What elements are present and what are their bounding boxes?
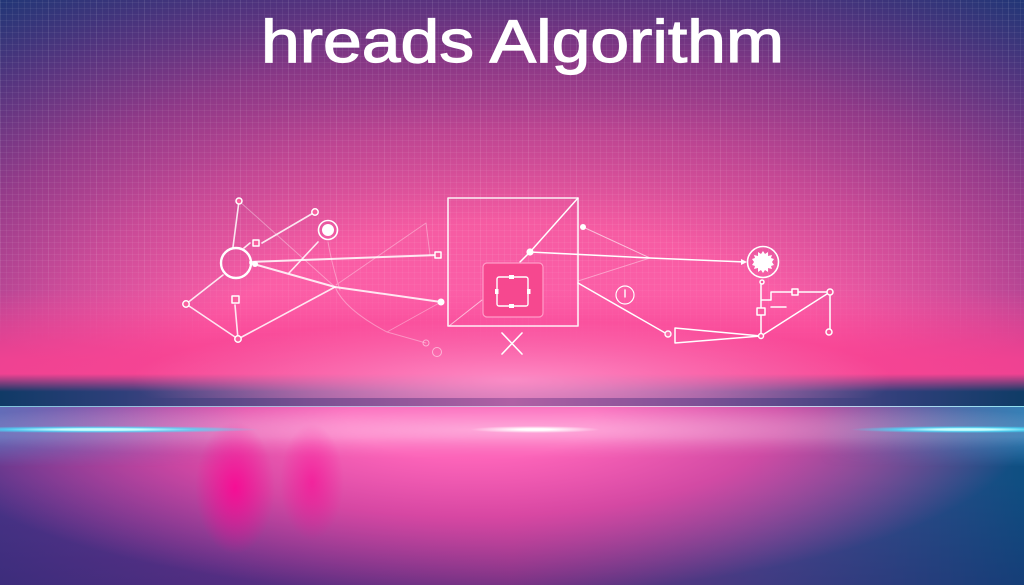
right network graph xyxy=(578,246,833,343)
light streak left xyxy=(0,426,260,433)
central box xyxy=(448,198,745,354)
title: hreads Algorithm xyxy=(261,8,784,75)
upper background with pink glow xyxy=(0,0,1024,406)
dark horizon band xyxy=(0,374,1024,406)
hub node xyxy=(221,248,251,278)
inner module xyxy=(483,263,543,317)
ring node xyxy=(318,220,338,240)
horizon line xyxy=(0,406,1024,407)
floor highlight haze xyxy=(0,407,1024,467)
light streak centre xyxy=(470,426,600,433)
small nodes xyxy=(183,198,441,342)
pink reflections xyxy=(0,420,1024,585)
lower glow over horizon xyxy=(0,310,1024,398)
cross arrows icon xyxy=(502,333,522,354)
left network graph xyxy=(183,198,445,356)
light streak right xyxy=(850,426,1024,433)
info icon xyxy=(616,286,634,304)
lower floor background xyxy=(0,406,1024,585)
grid pattern xyxy=(0,0,1024,345)
sun node xyxy=(748,246,778,278)
